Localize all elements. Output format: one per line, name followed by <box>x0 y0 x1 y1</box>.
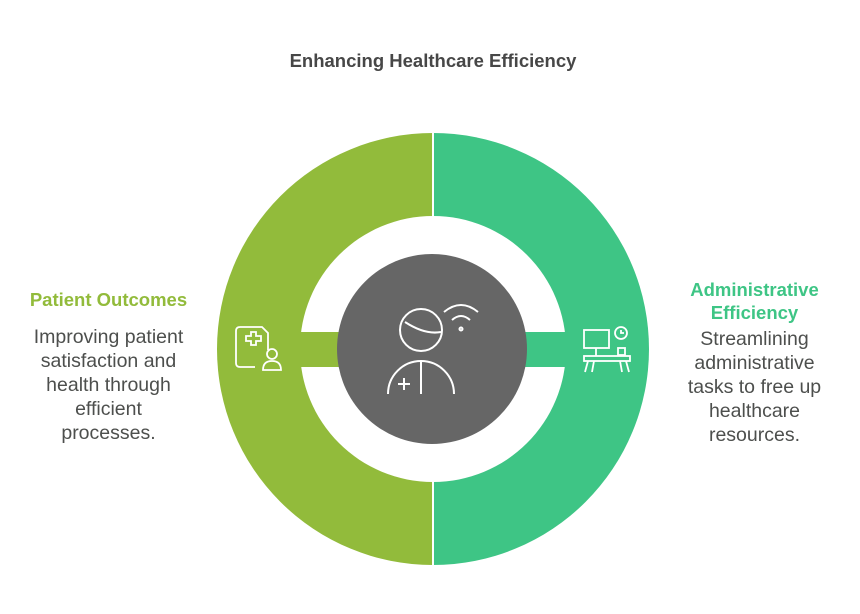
text block: Patient Outcomes <box>30 289 187 444</box>
panel: right half ring (Administrative Efficiency) <box>433 133 649 565</box>
heading: Administrative Efficiency: Efficiency <box>711 302 798 323</box>
text block: Patient Outcomes: efficient <box>75 398 142 420</box>
heading: Administrative Efficiency <box>690 279 819 323</box>
icon: doctor <box>388 305 478 394</box>
text block: Patient Outcomes: satisfaction and <box>41 350 176 372</box>
text block: Administrative Efficiency: administrative <box>694 352 815 374</box>
icon: patient record <box>236 327 281 370</box>
text block: Administrative Efficiency <box>688 279 821 446</box>
text block: Administrative Efficiency: resources. <box>709 424 800 446</box>
text block: Patient Outcomes: health through <box>46 374 171 396</box>
text block: Administrative Efficiency: healthcare <box>709 400 800 422</box>
text block: Administrative Efficiency: Streamlining <box>700 328 809 350</box>
text block: Administrative Efficiency: tasks to free up <box>688 376 821 398</box>
title: Enhancing Healthcare Efficiency <box>290 50 576 71</box>
center circle <box>337 254 527 444</box>
text block: Patient Outcomes: processes. <box>61 422 156 444</box>
panel: left half ring (Patient Outcomes) <box>217 133 433 565</box>
icon: office desk <box>584 327 630 372</box>
text block: Patient Outcomes: Improving patient <box>34 326 183 348</box>
heading: Patient Outcomes: Patient Outcomes <box>30 289 187 310</box>
heading: Administrative Efficiency: Administrative <box>690 279 819 300</box>
